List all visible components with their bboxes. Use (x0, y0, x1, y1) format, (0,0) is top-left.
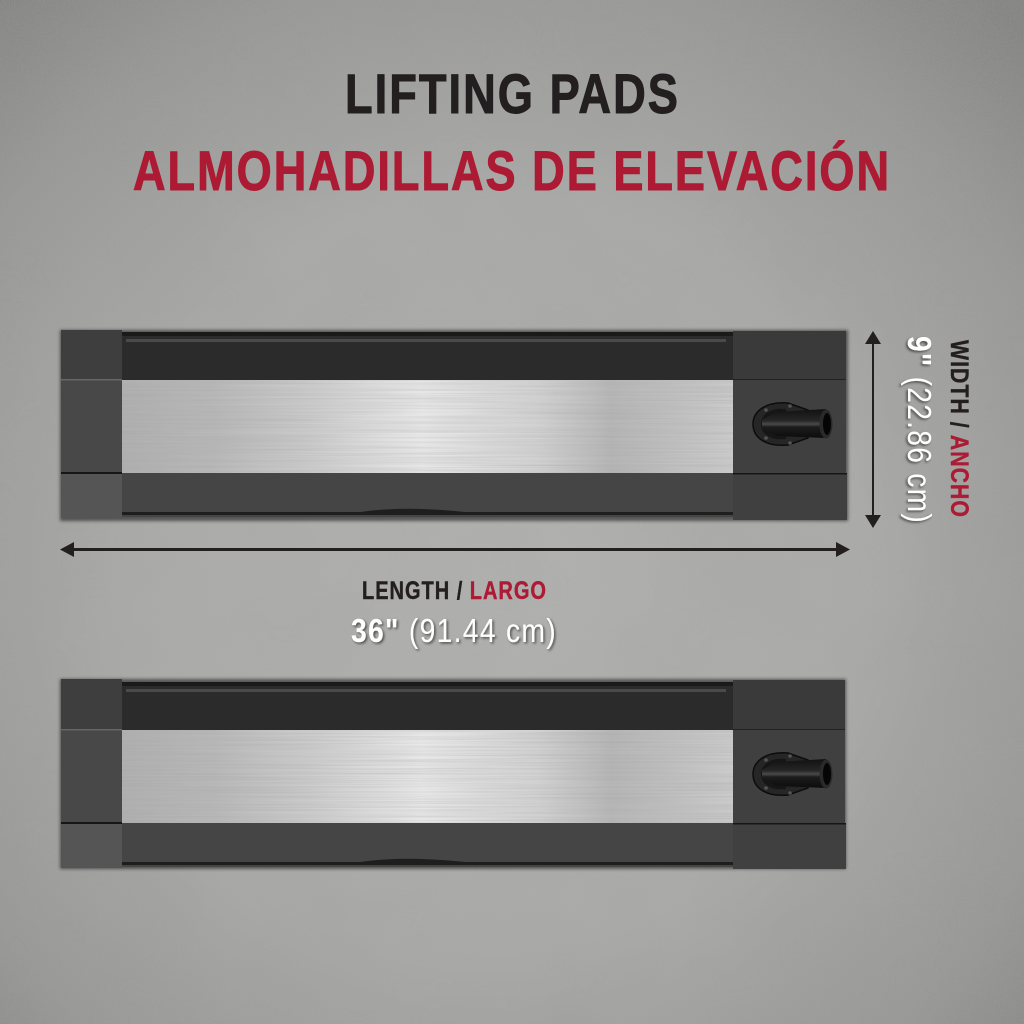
length label: LENGTH / LARGO (362, 577, 547, 605)
left end cap (61, 330, 122, 518)
right end cap (733, 331, 847, 520)
bottom band (122, 473, 733, 517)
brushed metal plate (122, 730, 733, 823)
icon: valve (753, 753, 832, 795)
brushed metal plate (122, 380, 733, 473)
arrow: length (60, 542, 850, 557)
width value: 9" (22.86 cm) (901, 336, 938, 524)
icon: valve (753, 403, 832, 445)
bottom band (122, 823, 733, 867)
heading: English: LIFTING PADS (345, 62, 680, 125)
label: width / ancho: WIDTH / ANCHO (945, 340, 973, 518)
top band (122, 682, 733, 730)
top band (122, 332, 733, 380)
lifting pad, top (60, 330, 848, 521)
lifting pad, bottom (60, 679, 846, 869)
right end cap (733, 680, 846, 869)
length value: 36" (91.44 cm) (351, 612, 557, 649)
left end cap (61, 679, 122, 868)
arrow: width (865, 331, 881, 528)
